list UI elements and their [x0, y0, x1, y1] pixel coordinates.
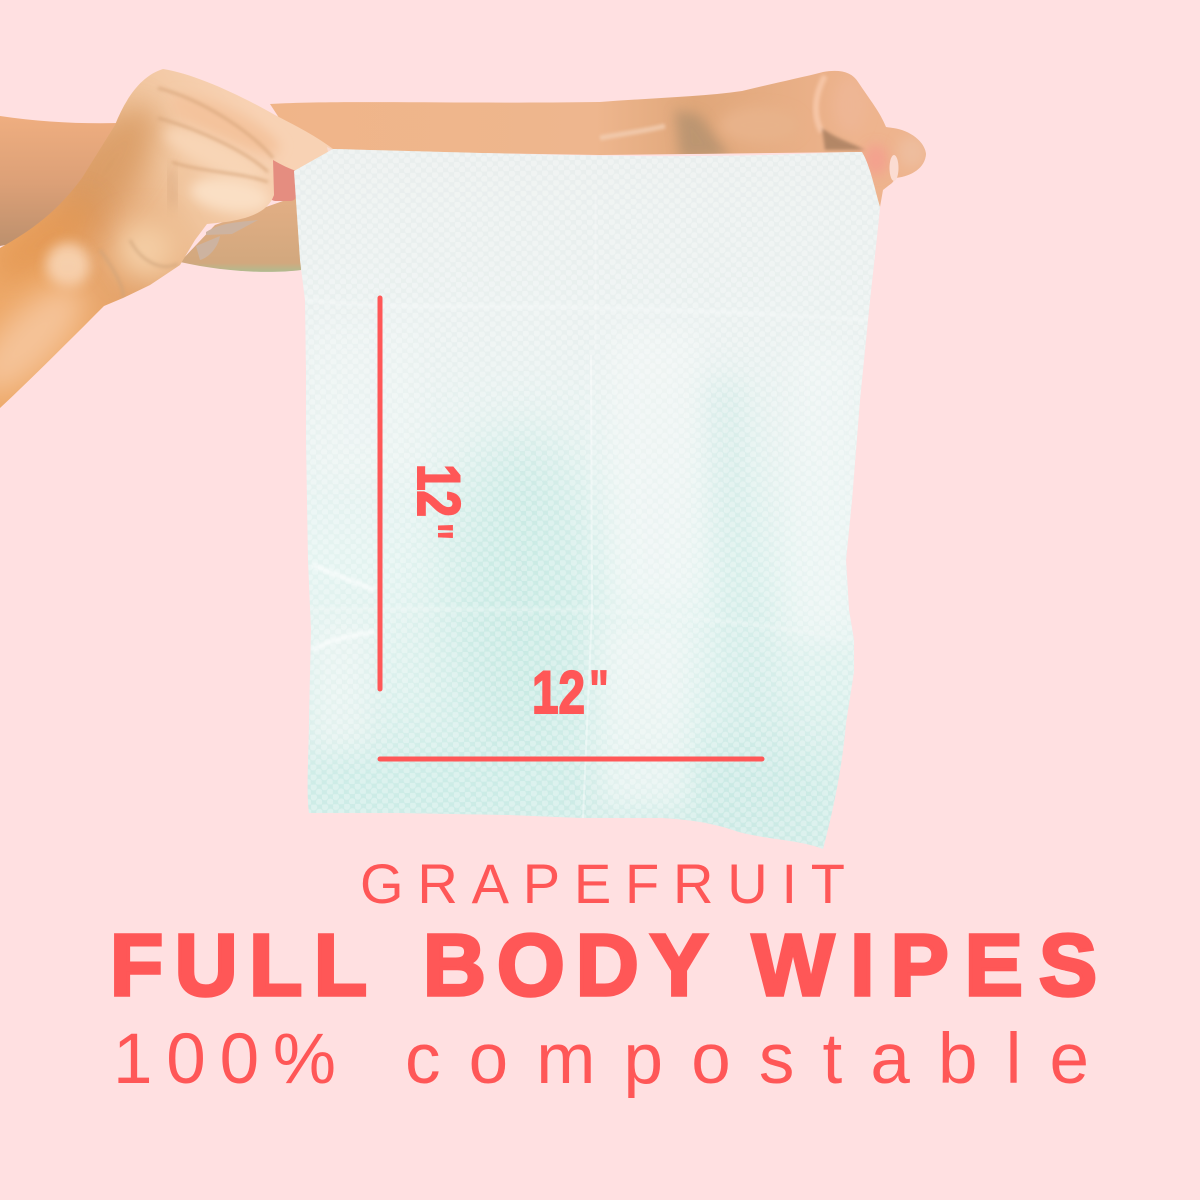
back forearm on the left [0, 116, 150, 246]
lower forearm behind the wipe [180, 195, 301, 272]
vertical size label: " [402, 523, 465, 540]
folds and creases [312, 356, 770, 818]
left hand and wrist [0, 69, 354, 409]
infographic canvas [0, 69, 1096, 1098]
fingernail [890, 155, 898, 181]
compostable claim: compostable [405, 1020, 1089, 1099]
horizontal size label: " [589, 658, 609, 721]
compostable claim: 100% [113, 1020, 336, 1099]
teal shading [316, 384, 846, 816]
wipe [260, 140, 890, 860]
tucked fingers [196, 220, 258, 260]
horizontal measure line [380, 756, 762, 762]
pink fingertip under the left hand [270, 157, 296, 201]
horizontal size label: 12 [532, 659, 585, 726]
photo: hands holding the wipe [0, 69, 926, 409]
fingernail [327, 147, 354, 172]
product title [110, 917, 1097, 1014]
right arm and hand [270, 71, 926, 207]
product title: WIPES [752, 917, 1097, 1014]
scent line: GRAPEFRUIT [360, 852, 845, 915]
product title: BODY [423, 917, 708, 1014]
product title: FULL [110, 917, 367, 1014]
vertical size label: 12 [405, 464, 472, 517]
vertical measure line [378, 298, 382, 689]
bubble texture [290, 140, 890, 860]
